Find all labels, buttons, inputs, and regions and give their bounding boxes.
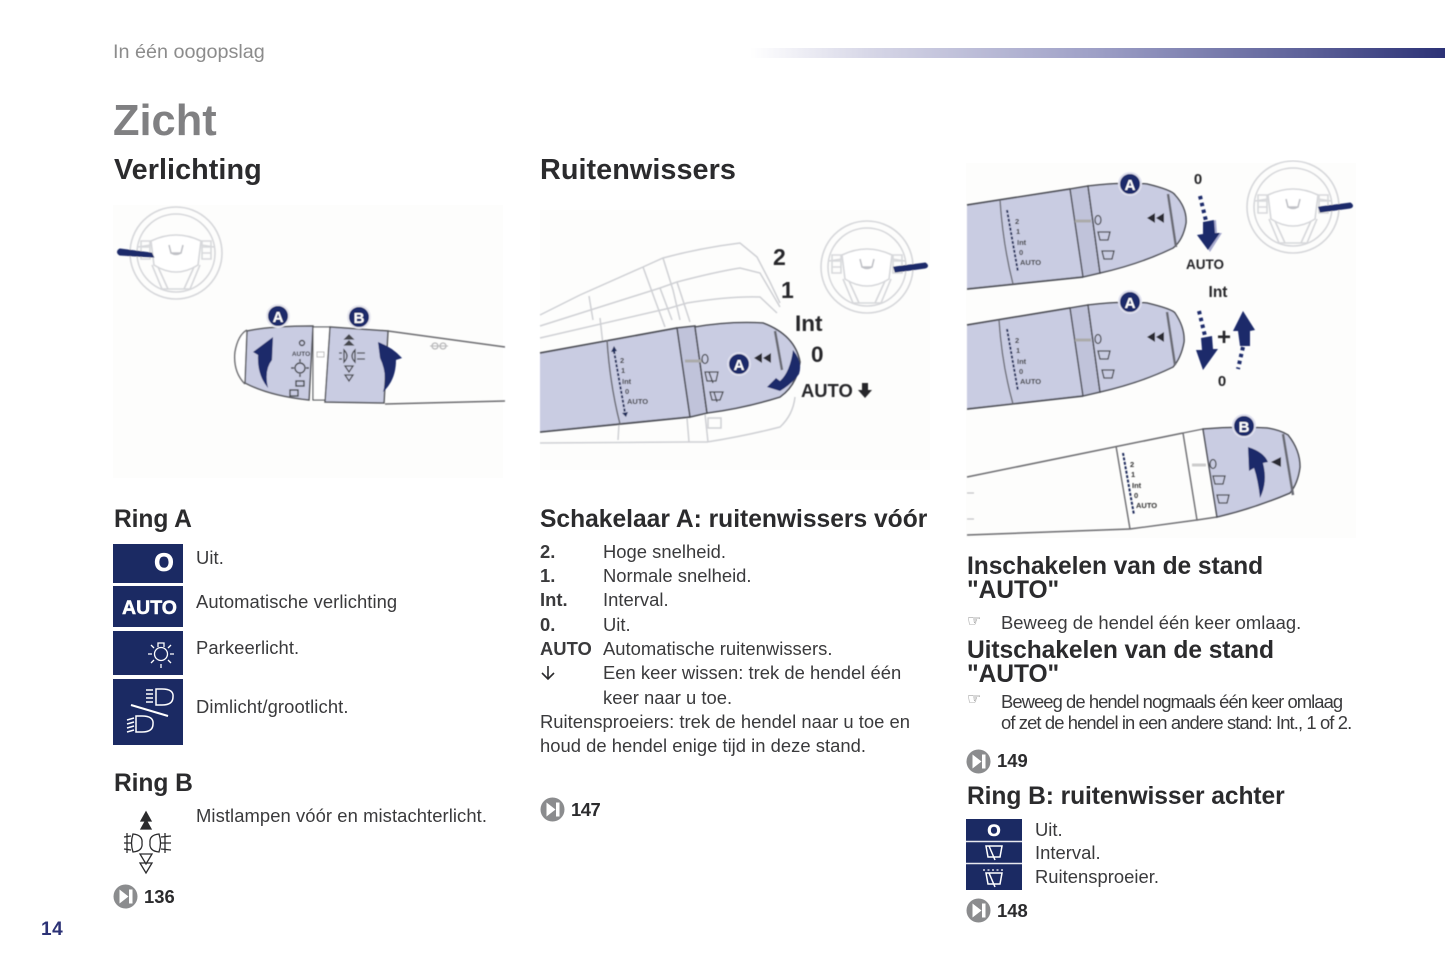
position labels	[1186, 171, 1231, 390]
arrow to AUTO	[1197, 196, 1222, 252]
wiper position list: Ruitensproeiers: trek de hendel naar u toe en	[540, 711, 910, 732]
lever top: 0	[1019, 248, 1023, 257]
wiper position list: AUTO	[540, 638, 592, 659]
heading: disable AUTO: Uitschakelen van de stand "AUTO"	[967, 637, 1274, 688]
ring B symbols	[339, 335, 365, 381]
lever scale: 1	[621, 366, 625, 375]
page reference 136: 136	[144, 886, 175, 907]
lever bottom: 2	[1130, 460, 1134, 469]
lever middle: 2	[1015, 336, 1019, 345]
lever top: Int	[1017, 238, 1027, 247]
icon: parking light	[113, 631, 183, 675]
heading: Ring A: Ring A	[114, 506, 192, 533]
icon: AUTO	[113, 586, 183, 627]
rotation arrows	[253, 337, 402, 392]
text: rear wiper states: Ruitensproeier.	[1035, 866, 1159, 887]
lever scale: 2	[620, 356, 624, 365]
position labels: AUTO	[1186, 257, 1224, 272]
page reference 147	[540, 798, 600, 822]
lever middle: AUTO	[1020, 377, 1041, 386]
position labels: Int	[1209, 284, 1227, 301]
badge B: B	[354, 310, 365, 327]
lever scale: 0	[625, 387, 629, 396]
lever top: AUTO	[1020, 258, 1041, 267]
title: Zicht	[113, 97, 217, 145]
badge A: A	[273, 309, 284, 326]
lever scale: AUTO	[627, 397, 648, 406]
lever bottom: Int	[1132, 481, 1142, 490]
page reference 148: 148	[997, 900, 1028, 921]
wiper position list: Uit.	[603, 614, 631, 635]
ring A symbols	[290, 340, 310, 396]
text: Uit: Uit.	[196, 547, 224, 568]
heading: Verlichting: Verlichting	[114, 154, 262, 186]
illustration: auto wiper and rear wiper stalks	[966, 160, 1354, 537]
steering wheel 2	[821, 221, 926, 313]
text: rear wiper states	[1035, 819, 1159, 887]
lever top	[967, 183, 1186, 289]
badge A: A	[734, 357, 745, 374]
page reference 149	[966, 750, 1028, 774]
page number: 14	[41, 919, 63, 940]
wiper position list: 1.	[540, 565, 555, 586]
wiper position list: houd de hendel enige tijd in deze stand.	[540, 735, 866, 756]
icon: fog lights	[124, 810, 172, 874]
position labels: +	[1217, 324, 1231, 351]
icon: dipped and main beam	[113, 679, 183, 745]
wiper position list	[540, 541, 910, 756]
heading: Ring B rear wiper: Ring B: ruitenwisser achter	[967, 783, 1285, 810]
top gradient bar	[750, 48, 1445, 58]
wiper position list: 2.	[540, 541, 555, 562]
wiper position list: Interval.	[603, 589, 669, 610]
text: Dimlicht/grootlicht: Dimlicht/grootlicht.	[196, 696, 349, 717]
position labels: AUTO	[801, 380, 853, 401]
step: disable AUTO: Beweeg de hendel nogmaals één keer omlaag	[1001, 691, 1342, 712]
wiper position list: Hoge snelheid.	[603, 541, 726, 562]
icon: AUTO: AUTO	[122, 597, 177, 619]
wiper position list: Normale snelheid.	[603, 565, 752, 586]
wiper position list: Automatische ruitenwissers.	[603, 638, 832, 659]
badges: A	[1125, 295, 1136, 312]
heading: enable AUTO: Inschakelen van de stand "AUTO"	[967, 553, 1263, 604]
text: fog lights: Mistlampen vóór en mistachterlicht.	[196, 805, 487, 826]
page reference 148	[966, 898, 1028, 922]
steering wheel 3	[1247, 161, 1352, 253]
lever middle: 1	[1016, 346, 1020, 355]
heading: Ring B: Ring B	[114, 770, 193, 797]
lever middle	[967, 302, 1184, 409]
icon stack: rear wiper	[966, 819, 1022, 890]
badges: A	[1125, 177, 1136, 194]
text: rear wiper states: Interval.	[1035, 842, 1101, 863]
step: disable AUTO: ☞	[967, 689, 981, 708]
position labels	[773, 244, 872, 401]
lever bottom: AUTO	[1136, 501, 1157, 510]
page reference 136	[114, 884, 175, 908]
badges: B	[1239, 419, 1250, 436]
lever middle: 0	[1019, 367, 1023, 376]
text: rear wiper states: Uit.	[1035, 819, 1063, 840]
wiper position list: Een keer wissen: trek de hendel één	[603, 662, 901, 683]
double triangle mark	[754, 353, 771, 363]
badge A	[728, 353, 750, 375]
step: disable AUTO: of zet de hendel in een andere stand: Int., 1 of 2.	[1001, 712, 1351, 733]
position labels: 1	[781, 277, 794, 303]
wiper position list: keer naar u toe.	[603, 687, 732, 708]
lever bottom: 1	[1131, 470, 1135, 479]
step: enable AUTO: Beweeg de hendel één keer omlaag.	[1001, 612, 1301, 633]
icon stack: rear wiper: O	[987, 821, 1001, 840]
ghost lever positions	[540, 243, 795, 443]
lever bottom: 0	[1134, 491, 1138, 500]
lever symbols	[702, 354, 723, 402]
step: enable AUTO: ☞	[967, 611, 981, 630]
icon: position off	[113, 544, 183, 583]
heading: Ruitenwissers: Ruitenwissers	[540, 154, 736, 186]
section label: In één oogopslag	[113, 40, 265, 62]
position labels: 0	[1218, 373, 1226, 390]
position labels: 0	[1194, 171, 1202, 188]
wiper motion arrow	[767, 350, 800, 391]
heading: switch A: Schakelaar A: ruitenwissers vóór	[540, 506, 927, 533]
lever body	[235, 326, 505, 404]
lever top: 2	[1015, 217, 1019, 226]
text: Automatische verlichting: Automatische verlichting	[196, 591, 397, 612]
badge A	[267, 305, 289, 327]
lever scale	[611, 346, 648, 417]
wiper position list: Int.	[540, 589, 568, 610]
position labels: Int	[795, 311, 823, 336]
lever top: 1	[1016, 227, 1020, 236]
lever bottom	[967, 427, 1300, 535]
icon: position off: O	[154, 549, 174, 577]
ring A symbols: AUTO	[292, 351, 310, 358]
text: Parkeerlicht: Parkeerlicht.	[196, 637, 299, 658]
illustration: lighting stalk and steering wheel	[116, 206, 506, 406]
position labels: 2	[773, 244, 786, 270]
lever middle: Int	[1017, 357, 1027, 366]
page reference 149: 149	[997, 750, 1028, 771]
badges	[1119, 173, 1255, 437]
steering wheel 1	[118, 207, 222, 299]
wiper position list: 0.	[540, 614, 555, 635]
active lever	[540, 322, 800, 432]
arrow down and up	[1196, 311, 1255, 370]
position labels: 0	[811, 342, 824, 367]
lever scale: Int	[622, 377, 632, 386]
page reference 147: 147	[571, 798, 600, 820]
step: disable AUTO	[967, 689, 1351, 733]
badge B	[348, 306, 370, 328]
illustration: wiper stalk positions	[539, 220, 929, 444]
